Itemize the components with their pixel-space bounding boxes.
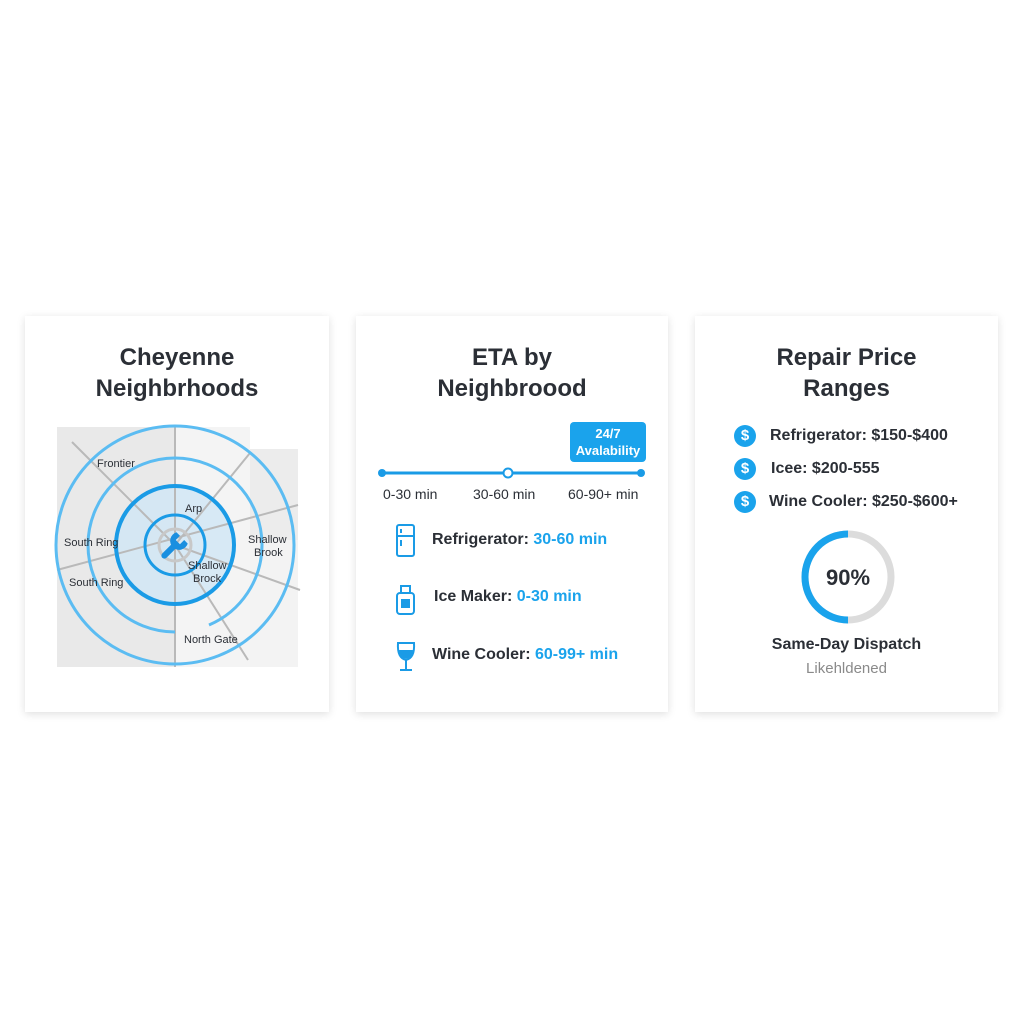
- heading: ETA by Neighborhood: [437, 344, 587, 402]
- map chart: North Gate: [184, 634, 238, 646]
- badge: 24/7 availability: [570, 422, 646, 462]
- row: wine cooler price: Wine Cooler: $250-$600+: [769, 493, 958, 510]
- panel: ETA: 0-30 min: [383, 486, 437, 502]
- icon: dollar 3: [734, 491, 756, 513]
- heading: Cheyenne Neighborhoods: Neighbrhoods: [96, 375, 258, 402]
- icon: dollar 1: [734, 425, 756, 447]
- panel: ETA: 60-90+ min: [568, 486, 638, 502]
- icon: ice maker: [396, 585, 415, 615]
- panel: ETA: 30-60 min: [473, 486, 535, 502]
- heading: Cheyenne Neighborhoods: Cheyenne: [120, 344, 234, 371]
- panel: repair prices: [695, 316, 998, 712]
- label: same-day dispatch: Same-Day Dispatch: [772, 636, 921, 653]
- map chart: Shallow: [188, 560, 227, 572]
- icon: dollar 1: $: [741, 427, 749, 444]
- icon: dollar 2: [734, 458, 756, 480]
- timeline: [378, 468, 645, 478]
- map chart: [54, 424, 300, 667]
- icon: dollar 2: $: [741, 460, 749, 477]
- heading: Repair Price Ranges: [776, 344, 917, 402]
- row: wine cooler ETA: Wine Cooler: 60-99+ min: [432, 646, 618, 663]
- badge: 24/7 availability: 24/7: [595, 426, 621, 441]
- icon: refrigerator: [396, 524, 415, 557]
- heading: Repair Price Ranges: Ranges: [803, 375, 890, 402]
- row: refrigerator ETA: Refrigerator: 30-60 min: [432, 531, 607, 548]
- panel: ETA: [356, 316, 668, 712]
- row: ice maker ETA: Ice Maker: 0-30 min: [434, 588, 582, 605]
- map chart: Shallow: [248, 534, 287, 546]
- panel: neighborhoods: [25, 316, 329, 712]
- icon: dollar 3: $: [741, 493, 749, 510]
- donut chart: 90%: 90%: [826, 565, 870, 590]
- map chart: Frontier: [97, 458, 135, 470]
- row: refrigerator price: Refrigerator: $150-$400: [770, 427, 948, 444]
- icon: wrench: [156, 532, 188, 564]
- heading: ETA by Neighborhood: Neighbroood: [437, 375, 587, 402]
- heading: ETA by Neighborhood: ETA by: [472, 344, 552, 371]
- heading: Cheyenne Neighborhoods: [96, 344, 258, 402]
- map chart: Brock: [193, 573, 222, 585]
- donut chart: 90%: [802, 530, 894, 624]
- badge: 24/7 availability: Avalability: [576, 443, 640, 458]
- map chart: South Ring: [69, 577, 123, 589]
- map chart: Brook: [254, 547, 283, 559]
- heading: Repair Price Ranges: Repair Price: [776, 344, 917, 371]
- icon: wine glass: [396, 642, 416, 671]
- map chart: South Ring: [64, 537, 118, 549]
- map chart: Arp: [185, 503, 202, 515]
- price list: [734, 425, 958, 513]
- row: ice price: Icee: $200-555: [771, 460, 880, 477]
- sublabel: Likehldened: [806, 660, 887, 677]
